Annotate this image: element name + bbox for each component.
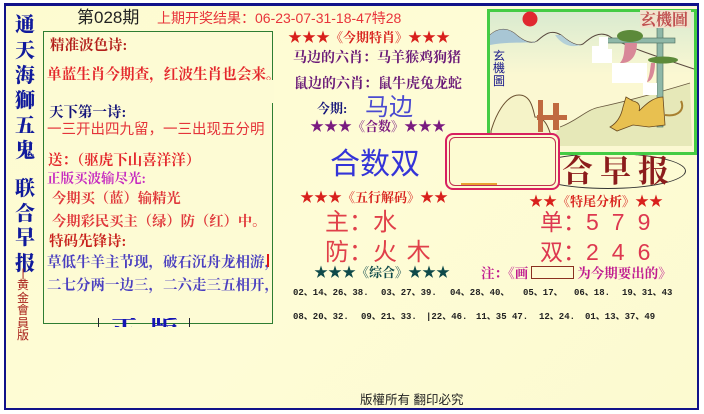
heading: this issue special zodiac: ★★★《今期特肖》★★★ <box>288 30 450 46</box>
heading: composite number: ★★★《合数》★★★ <box>310 119 446 135</box>
stamp: 玄機圖 <box>640 10 688 29</box>
poem: blue line one: 草低牛羊主节现，破石沉舟龙相游， <box>47 255 279 271</box>
heading: wave betting: 正版买波输尽光: <box>47 171 146 186</box>
note with box: 注：《画 为今期要出的》 <box>481 266 672 281</box>
masthead column: title characters: 通 <box>15 14 35 36</box>
zodiac line: horse side: 马边的六肖：马羊猴鸡狗猪 <box>293 51 461 66</box>
vertical label: 玄 <box>493 48 505 63</box>
number groups row two <box>293 312 655 322</box>
number groups row two: 01、13、37、49 <box>585 312 655 322</box>
number groups row one: 05、17、 <box>523 288 563 298</box>
orange strip in box <box>461 183 497 185</box>
vertical member edition label: 版 <box>17 328 29 342</box>
poem: top: 一三开出四九留，一三出现五分明 <box>47 122 264 138</box>
masthead ellipse with red title <box>530 153 686 189</box>
panel: poems <box>43 31 273 324</box>
previous draw results: 上期开奖结果：06-23-07-31-18-47特28 <box>157 10 401 26</box>
fence <box>538 100 543 132</box>
odd numbers: 单：579 <box>540 209 663 235</box>
mountains <box>490 29 694 69</box>
poem: buy blue: 今期买（蓝）输精光 <box>52 191 181 207</box>
post <box>657 25 663 127</box>
composite number value: 合数双 <box>330 148 420 181</box>
zodiac line: rat side: 鼠边的六肖：鼠牛虎兔龙蛇 <box>294 77 462 92</box>
element guard: 防：火 木 <box>325 239 431 266</box>
number groups row two: 11、35 47. <box>476 312 528 322</box>
vertical member edition label: 黄 <box>17 278 29 292</box>
masthead column: title characters: 海 <box>15 65 35 87</box>
illustration: xuanji picture: 機 <box>493 60 505 75</box>
sun <box>522 12 538 26</box>
ground <box>547 83 692 146</box>
label: this issue: 今期: <box>317 101 347 116</box>
number groups row one: 03、27、39. <box>381 288 437 298</box>
masthead column: title characters: 天 <box>15 40 35 62</box>
masthead column: title characters: 早 <box>15 227 35 249</box>
red tick mark at panel edge <box>267 254 269 267</box>
copyright footer: 版權所有 翻印必究 <box>360 393 463 407</box>
poem: blue line two: 二七分两一边三，二六走三五相开， <box>47 278 279 294</box>
heading: special code poem: 特码先锋诗: <box>49 234 126 250</box>
bush <box>491 95 553 143</box>
number groups row one: 06、18. <box>574 288 610 298</box>
number groups row two: 08、20、32. <box>293 312 349 322</box>
heading: tail analysis: ★★《特尾分析》★★ <box>529 194 663 210</box>
illustration: xuanji picture <box>487 9 697 155</box>
poem: wave: 单蓝生肖今期查，红波生肖也会来。 <box>47 67 281 83</box>
even numbers: 双：246 <box>540 239 663 265</box>
element primary: 主：水 <box>325 209 397 236</box>
number groups row one <box>293 288 672 298</box>
masthead column: title characters: 五 <box>15 115 35 137</box>
number groups row two: |22、46. <box>426 312 467 322</box>
masthead column: title characters: 獅 <box>15 90 35 112</box>
leaves <box>617 30 643 42</box>
number groups row two: 09、21、33. <box>361 312 417 322</box>
vertical member edition label: 會 <box>17 303 29 317</box>
gap in panel border <box>266 80 274 103</box>
heading: precise wave poem: 精准波色诗: <box>50 38 127 54</box>
heading: five elements: ★★★《五行解码》★★ <box>300 190 448 206</box>
cat <box>610 97 665 131</box>
masthead column: title characters: 报 <box>15 253 35 275</box>
hanging cloth <box>620 43 637 63</box>
number groups row one: 19、31、43 <box>622 288 672 298</box>
issue number: 第028期 <box>77 8 139 27</box>
this issue value: 马边 <box>365 94 413 121</box>
number groups row one: 02、14、26、38. <box>293 288 369 298</box>
vertical member edition label: 金 <box>17 291 29 305</box>
masthead column: title characters: 鬼 <box>15 140 35 162</box>
number groups row one: 04、28、40、 <box>450 288 509 298</box>
red title text: 综合早报 <box>524 154 676 189</box>
vertical member edition label: 員 <box>17 316 29 330</box>
masthead column: title characters <box>15 14 35 275</box>
illustration: xuanji picture: 圖 <box>493 74 505 88</box>
masthead column: title characters: 合 <box>15 203 35 225</box>
white patches <box>592 37 657 95</box>
crimson rounded box <box>445 133 560 190</box>
poem: buy green red: 今期彩民买主（绿）防（红）中。 <box>52 214 266 230</box>
masthead column: title characters: 联 <box>15 178 35 200</box>
heading: comprehensive: ★★★《综合》★★★ <box>314 265 450 281</box>
heading: top poem: 天下第一诗: <box>49 105 126 121</box>
poem: gift line: 送：（驱虎下山喜洋洋） <box>48 153 200 169</box>
vertical member edition label <box>17 266 29 342</box>
number groups row two: 12、24. <box>539 312 575 322</box>
vertical member edition label: | <box>21 266 25 280</box>
